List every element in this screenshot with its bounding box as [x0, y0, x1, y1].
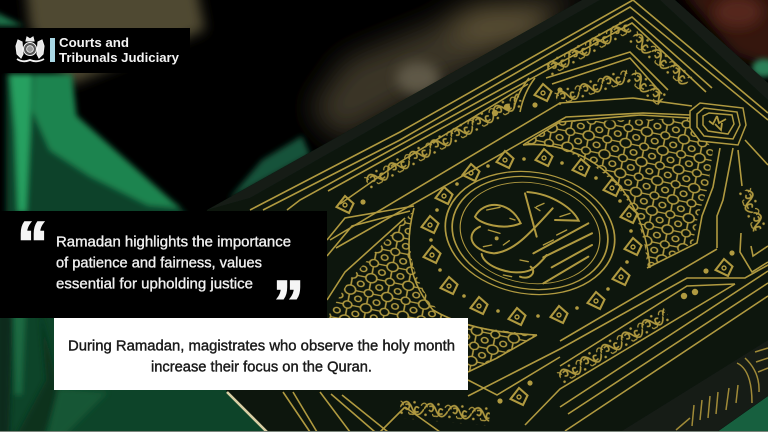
- bottom edge line: [0, 431, 768, 432]
- caption text: increase their focus on the Quran.: [151, 360, 372, 376]
- opening quote mark: “: [17, 210, 48, 279]
- logo wordmark: Tribunals Judiciary: [59, 51, 179, 65]
- green cloth lower left: [0, 310, 272, 432]
- lattice panels: [327, 118, 713, 372]
- tan blur top left: [25, 0, 205, 85]
- caption text: [68, 338, 455, 376]
- blurred object behind book: [310, 0, 590, 140]
- green cloth behind book: [228, 136, 310, 200]
- cream page edge: [227, 392, 267, 432]
- logo wordmark: [59, 36, 179, 65]
- logo banner: [0, 28, 190, 73]
- logo divider bar: [50, 38, 55, 62]
- quote panel: [0, 210, 327, 338]
- ring of diamonds: [336, 84, 732, 405]
- red brown blur top right: [680, 0, 768, 70]
- arabesque bands: [363, 18, 768, 426]
- quran book cover: [180, 0, 768, 432]
- cover body: [180, 0, 768, 432]
- icon: royal coat of arms: [16, 37, 44, 61]
- green corner bottom right: [717, 396, 768, 432]
- small dots around diamonds: [360, 87, 735, 404]
- left frame lines: [327, 206, 414, 240]
- quote text: [56, 234, 291, 292]
- lower frame lines: [560, 249, 717, 341]
- medallion surround arcs: [523, 145, 650, 268]
- logo wordmark: Courts and: [59, 36, 129, 50]
- medallion calligraphy: [472, 192, 592, 283]
- lower left lines: [283, 392, 310, 432]
- medallion rings: [411, 148, 649, 318]
- spine lettering: [676, 348, 768, 430]
- quote text: Ramadan highlights the importance: [56, 234, 291, 250]
- caption panel: [54, 318, 468, 390]
- quote text: of patience and fairness, values: [56, 256, 262, 272]
- caption text: During Ramadan, magistrates who observe the holy month: [68, 338, 455, 354]
- green cloth upper left: [0, 12, 188, 216]
- quote text: essential for upholding justice: [56, 276, 253, 292]
- border lines: [250, 0, 768, 432]
- closing quote mark: ”: [273, 269, 304, 338]
- corner ornament: [690, 103, 746, 145]
- right panel lines: [647, 148, 720, 268]
- spine shadow: [620, 340, 768, 432]
